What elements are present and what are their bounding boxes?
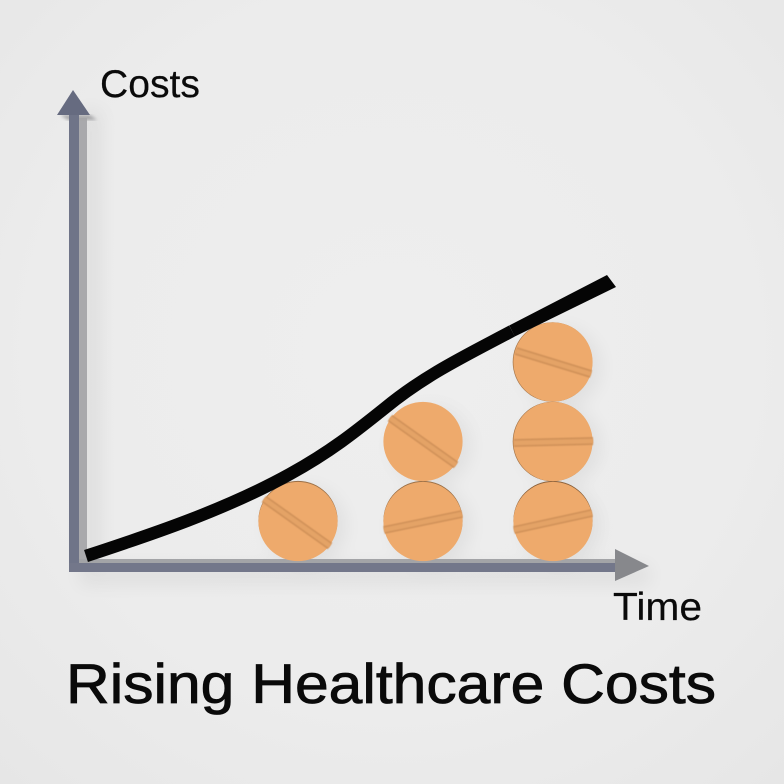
rising cost curve: [86, 275, 616, 556]
pill 1: [258, 481, 338, 561]
y axis label: Costs: [100, 63, 200, 106]
y axis arrow: [57, 90, 97, 571]
pill 3 bottom: [513, 481, 593, 561]
pill 2 top: [383, 402, 463, 481]
soft shadows: [80, 110, 650, 585]
x axis label: Time: [613, 586, 702, 629]
pill 3 top: [513, 322, 593, 402]
pill 2 bottom: [383, 481, 463, 561]
pill 3 middle: [513, 402, 593, 481]
title: Rising Healthcare Costs: [66, 652, 716, 715]
x axis arrow: [69, 549, 649, 581]
